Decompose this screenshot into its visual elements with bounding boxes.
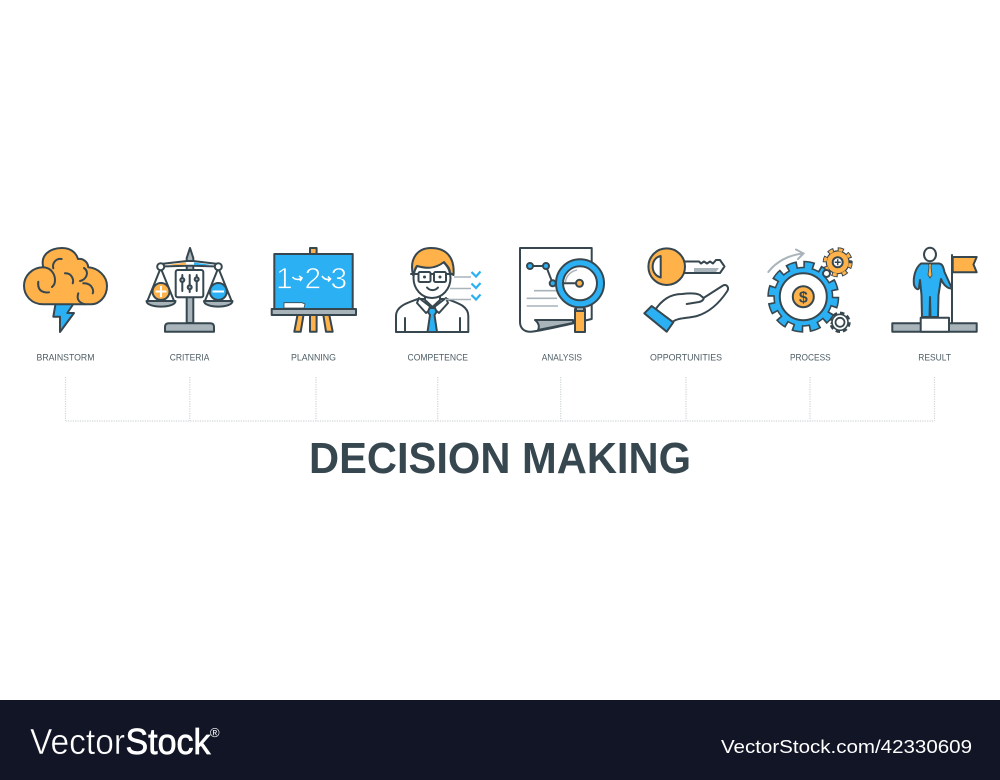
board numbers: 2 — [304, 262, 321, 296]
connecting cog — [823, 270, 830, 277]
scale base — [165, 323, 214, 332]
plus circle — [152, 283, 170, 300]
main blue gear — [771, 265, 835, 329]
magnifier neck — [576, 306, 584, 311]
face — [414, 258, 450, 298]
magnifier ring — [556, 259, 604, 307]
person tie — [928, 264, 932, 278]
scale beam — [161, 261, 218, 266]
registered mark: ® — [210, 725, 220, 740]
orange gear — [825, 249, 851, 275]
icon: planning board — [272, 248, 356, 332]
icon: analysis — [520, 248, 604, 332]
easel top peg — [310, 248, 317, 254]
lightning bolt — [53, 304, 74, 332]
chart line — [530, 266, 553, 283]
flag — [953, 257, 977, 272]
pan cords — [147, 268, 232, 302]
board numbers — [276, 262, 347, 296]
tray — [272, 309, 356, 315]
person body — [914, 264, 952, 317]
brain folds — [38, 259, 93, 304]
key teeth shading — [694, 268, 719, 272]
shoulders and torso — [396, 299, 468, 332]
board numbers: 3 — [330, 262, 347, 296]
document — [520, 248, 592, 332]
footer logo: Stock — [126, 721, 211, 762]
icon: process gears — [768, 249, 851, 331]
step arrows — [292, 276, 330, 282]
text lines — [527, 291, 558, 306]
icon: criteria scales — [146, 248, 232, 332]
left pan — [146, 301, 176, 307]
chalk — [284, 303, 305, 308]
key hole — [653, 256, 661, 278]
icon: brainstorm — [24, 248, 107, 332]
dollar sign: $ — [799, 290, 808, 306]
white gear — [831, 313, 849, 331]
page curl — [535, 320, 573, 330]
slider panel — [176, 270, 203, 297]
label: planning: PLANNING — [291, 352, 336, 364]
lens line — [563, 282, 576, 284]
arm seams — [405, 318, 460, 332]
scale post — [187, 248, 193, 323]
label: result: RESULT — [918, 352, 951, 364]
neck — [425, 292, 440, 307]
glasses — [411, 273, 453, 275]
magnifier handle — [575, 309, 585, 332]
icon: result — [892, 248, 977, 332]
podium — [921, 318, 949, 332]
checklist lines — [445, 277, 471, 300]
easel legs — [294, 315, 333, 332]
right pan — [204, 301, 232, 307]
key head — [648, 248, 685, 285]
hair — [412, 248, 454, 275]
beam pivots — [157, 263, 164, 270]
title: DECISION MAKING — [309, 434, 691, 483]
dollar coin — [793, 286, 814, 307]
check marks — [472, 272, 480, 300]
label: brainstorm: BRAINSTORM — [36, 352, 95, 364]
base platform — [892, 323, 977, 332]
tie — [428, 308, 437, 332]
smile — [427, 288, 438, 290]
chart dots — [527, 263, 533, 269]
board — [274, 254, 353, 309]
icon: competence person — [396, 248, 480, 332]
minus circle — [210, 283, 227, 300]
label: opportunities: OPPORTUNITIES — [650, 352, 722, 364]
footer logo: Vector — [30, 721, 125, 762]
label: criteria: CRITERIA — [170, 352, 210, 364]
label: competence: COMPETENCE — [408, 352, 468, 364]
magnifier lens — [563, 266, 597, 300]
sliders — [182, 275, 197, 292]
person head — [924, 248, 936, 261]
footer image id: VectorStock.com/42330609 — [721, 737, 972, 757]
flag pole — [951, 255, 953, 323]
collar — [417, 298, 448, 313]
eyes — [423, 276, 426, 278]
hand — [655, 285, 728, 322]
board numbers: 1 — [276, 262, 293, 296]
lens highlight — [566, 270, 577, 282]
icon: opportunities — [644, 248, 728, 332]
lens dot — [576, 280, 583, 287]
footer bar — [0, 700, 1000, 780]
progress arrow — [768, 250, 804, 272]
dotted connector — [66, 377, 934, 421]
beam accents — [167, 262, 186, 265]
label: process: PROCESS — [790, 352, 831, 364]
key blade — [684, 260, 724, 273]
brain cloud — [24, 248, 107, 304]
thumb line — [687, 298, 704, 304]
cuff — [644, 306, 673, 332]
label: analysis: ANALYSIS — [542, 352, 582, 364]
